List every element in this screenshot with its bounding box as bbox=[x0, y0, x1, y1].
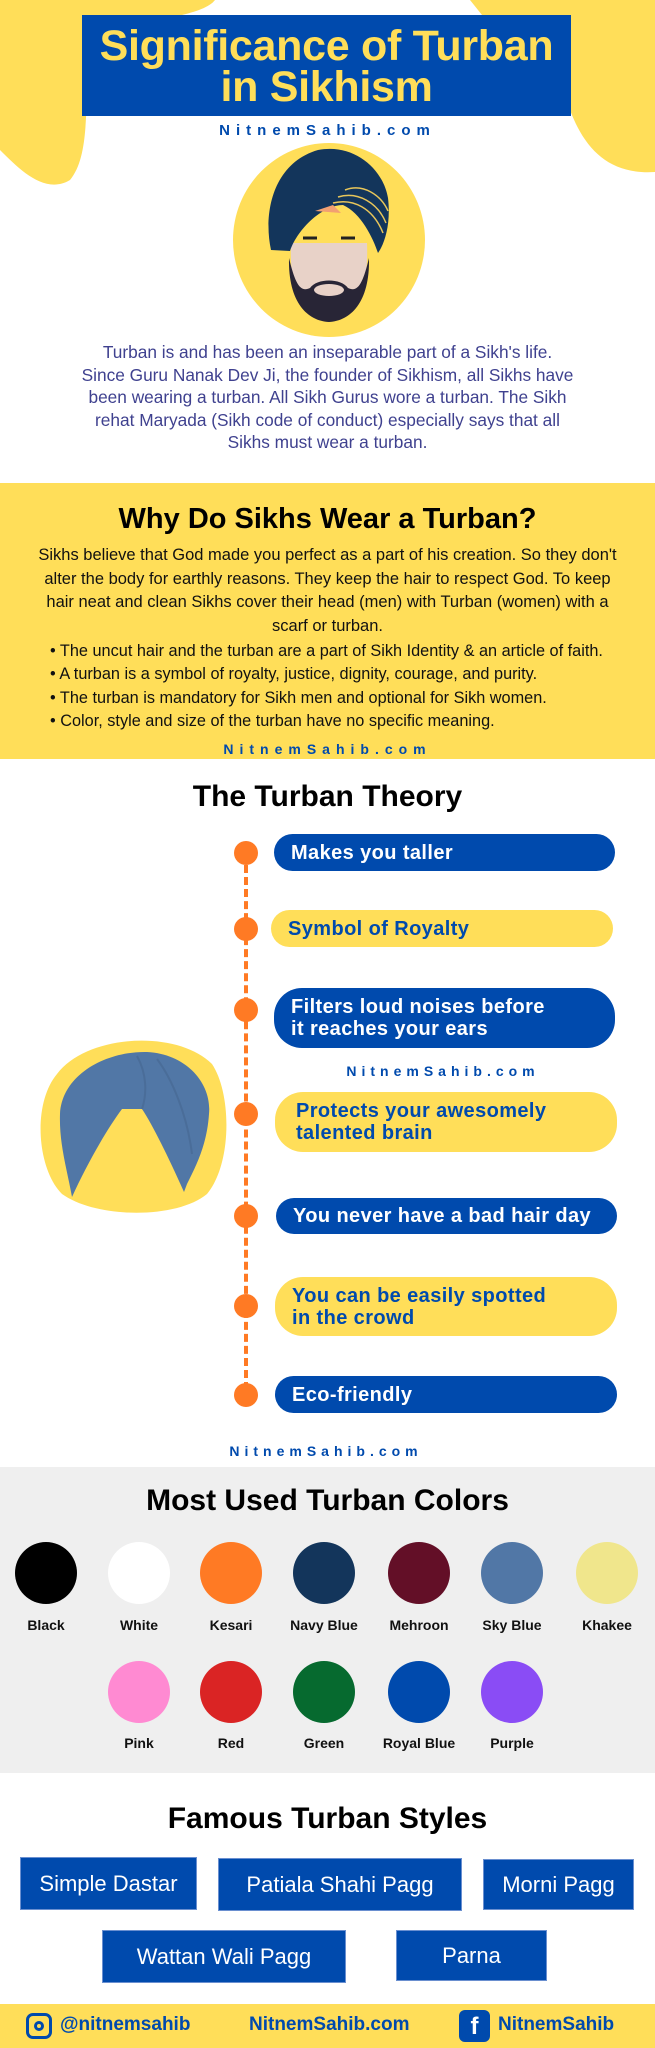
title bbox=[82, 15, 571, 116]
heading: the turban theory: The Turban Theory bbox=[193, 780, 462, 813]
style boxes: Patiala Shahi Pagg bbox=[246, 1872, 434, 1896]
footer: NitnemSahib.com bbox=[249, 2014, 409, 2035]
pill: filters loud noises: it reaches your ears bbox=[291, 1018, 488, 1040]
pill: protects brain: talented brain bbox=[296, 1122, 433, 1144]
intro paragraph bbox=[82, 342, 573, 452]
style boxes: Parna bbox=[442, 1942, 501, 1968]
style boxes: Simple Dastar bbox=[39, 1870, 178, 1896]
color swatches: Pink bbox=[124, 1735, 154, 1751]
explanation text: scarf or turban. bbox=[272, 616, 383, 634]
bullet list: • The uncut hair and the turban are a part of Sikh Identity & an article of faith. bbox=[50, 642, 603, 660]
site url: NitnemSahib.com bbox=[229, 1443, 423, 1459]
bullet list: • A turban is a symbol of royalty, justice, dignity, courage, and purity. bbox=[50, 665, 537, 683]
icon: instagram bbox=[26, 2013, 52, 2039]
icon: turban bbox=[40, 1040, 226, 1213]
color swatches: Royal Blue bbox=[383, 1735, 455, 1751]
color swatches: White bbox=[120, 1617, 158, 1633]
style boxes bbox=[20, 1857, 634, 1983]
color swatches: Kesari bbox=[210, 1617, 252, 1633]
footer: @nitnemsahib bbox=[60, 2014, 190, 2035]
intro paragraph: rehat Maryada (Sikh code of conduct) especially says that all bbox=[95, 410, 560, 430]
title: in Sikhism bbox=[220, 63, 433, 111]
bullet list: • Color, style and size of the turban have no specific meaning. bbox=[50, 712, 495, 730]
pill: makes you taller bbox=[274, 834, 615, 871]
color swatches: Navy Blue bbox=[290, 1617, 358, 1633]
footer: NitnemSahib bbox=[498, 2014, 614, 2035]
bullet list: • The turban is mandatory for Sikh men and optional for Sikh women. bbox=[50, 689, 547, 707]
icon: sikh man portrait bbox=[233, 143, 425, 337]
explanation text: hair neat and clean Sikhs cover their head (men) with Turban (women) with a bbox=[46, 593, 609, 611]
footer bbox=[0, 2004, 655, 2048]
color swatches bbox=[15, 1542, 638, 1751]
style boxes: Wattan Wali Pagg bbox=[137, 1944, 311, 1968]
pill: eco-friendly: Eco-friendly bbox=[292, 1384, 412, 1406]
intro paragraph: Turban is and has been an inseparable part of a Sikh's life. bbox=[103, 342, 552, 362]
color swatches: Black bbox=[27, 1617, 65, 1633]
pill: easily spotted bbox=[275, 1277, 617, 1336]
title: Significance of Turban bbox=[100, 22, 553, 70]
bullet list bbox=[50, 642, 603, 730]
pill: bad hair day bbox=[276, 1198, 617, 1234]
timeline dots bbox=[234, 841, 258, 1407]
color swatches: Khakee bbox=[582, 1617, 632, 1633]
pill: symbol of royalty bbox=[271, 910, 613, 947]
explanation text: Sikhs believe that God made you perfect as a part of his creation. So they don't bbox=[38, 546, 617, 564]
site url: NitnemSahib.com bbox=[219, 122, 436, 139]
color swatches: Purple bbox=[490, 1735, 534, 1751]
decorative blobs bbox=[0, 0, 655, 185]
explanation text bbox=[38, 546, 617, 634]
panel: why do sikhs wear a turban bbox=[0, 483, 655, 759]
heading: Most Used Turban Colors bbox=[146, 1484, 509, 1517]
intro paragraph: Since Guru Nanak Dev Ji, the founder of Sikhism, all Sikhs have bbox=[82, 364, 573, 384]
pill: easily spotted: You can be easily spotted bbox=[292, 1284, 546, 1306]
pill: protects brain bbox=[275, 1092, 617, 1152]
site url: NitnemSahib.com bbox=[223, 741, 432, 757]
site url: NitnemSahib.com bbox=[346, 1063, 540, 1079]
pill: filters loud noises: Filters loud noises before bbox=[291, 996, 545, 1018]
pill: makes you taller: Makes you taller bbox=[291, 842, 453, 864]
heading: famous turban styles: Famous Turban Styles bbox=[168, 1802, 487, 1835]
explanation text: alter the body for earthly reasons. They keep the hair to respect God. To keep bbox=[44, 570, 611, 588]
color swatches: Sky Blue bbox=[482, 1617, 542, 1633]
pill: filters loud noises bbox=[274, 988, 615, 1048]
intro paragraph: Sikhs must wear a turban. bbox=[228, 432, 427, 452]
color swatches: Red bbox=[218, 1735, 244, 1751]
pill: bad hair day: You never have a bad hair day bbox=[293, 1205, 591, 1227]
pill: easily spotted: in the crowd bbox=[292, 1306, 415, 1328]
style boxes: Morni Pagg bbox=[502, 1872, 615, 1896]
timeline dashed line bbox=[244, 865, 248, 1390]
icon: facebook: f bbox=[470, 2013, 478, 2040]
panel: most used turban colors bbox=[0, 1467, 655, 1773]
pill: protects brain: Protects your awesomely bbox=[296, 1100, 546, 1122]
intro paragraph: been wearing a turban. All Sikh Gurus wore a turban. The Sikh bbox=[88, 387, 567, 407]
pill: symbol of royalty: Symbol of Royalty bbox=[288, 918, 469, 940]
color swatches: Mehroon bbox=[389, 1617, 449, 1633]
icon: facebook bbox=[459, 2010, 490, 2042]
color swatches: Green bbox=[304, 1735, 344, 1751]
heading: Why Do Sikhs Wear a Turban? bbox=[119, 503, 536, 535]
pill: eco-friendly bbox=[275, 1376, 617, 1413]
